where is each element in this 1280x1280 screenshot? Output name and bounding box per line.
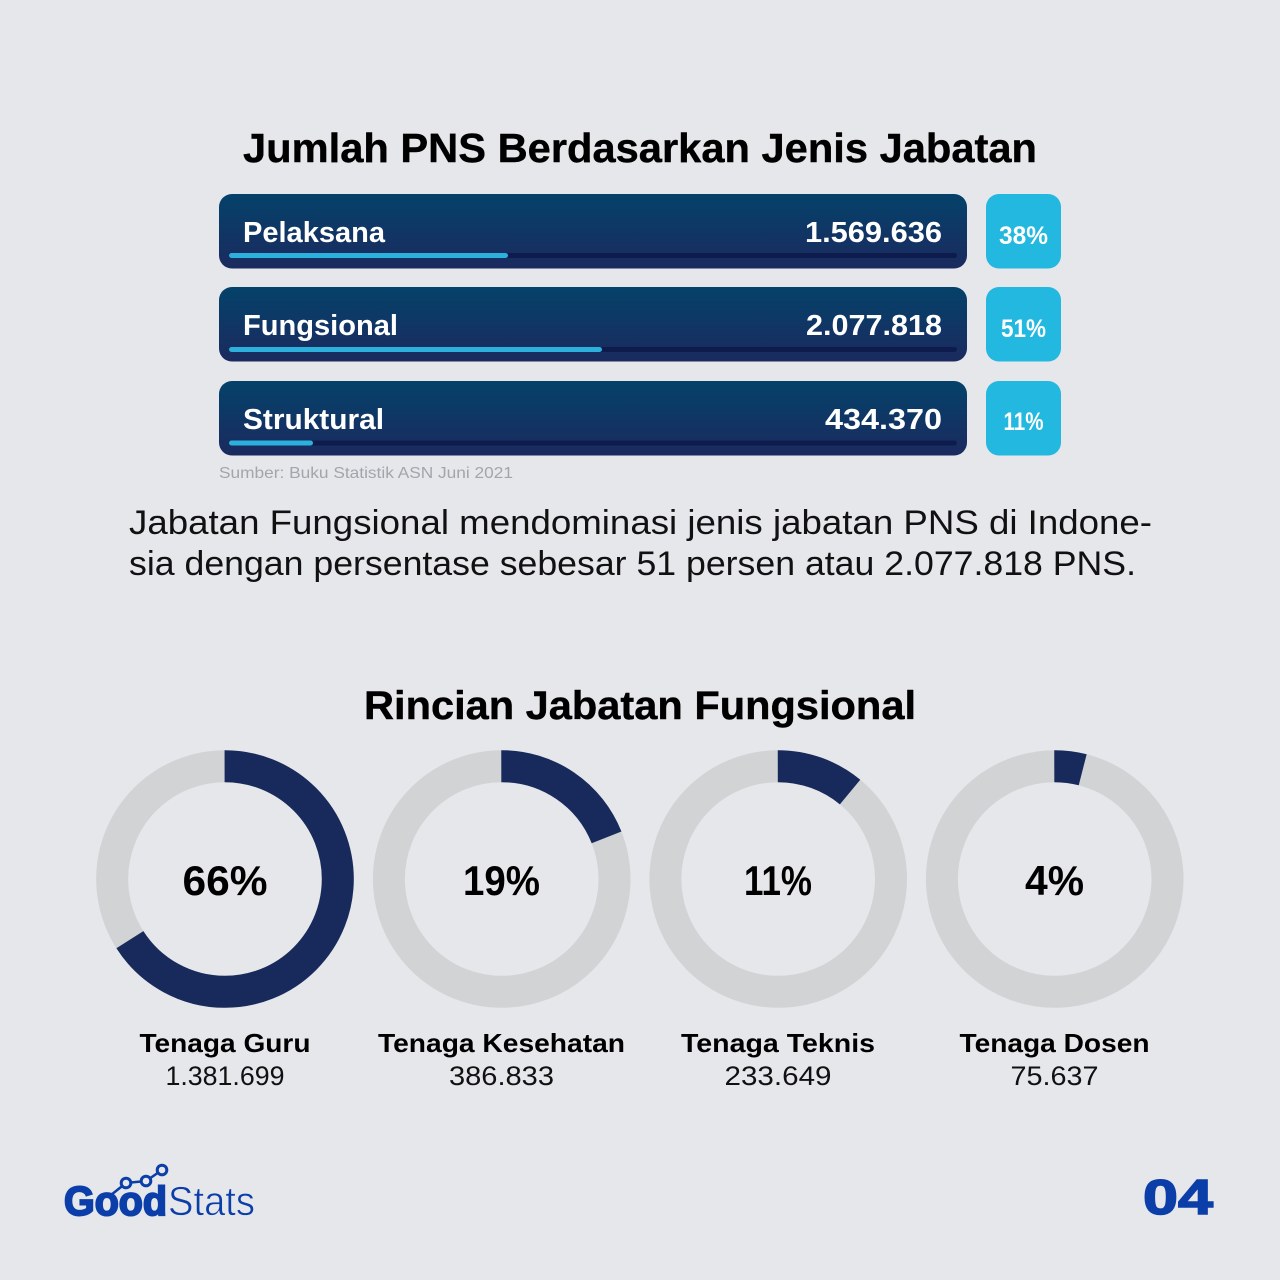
bar row: Struktural: Struktural xyxy=(243,404,384,436)
bar row: Struktural xyxy=(219,381,967,456)
donut: Tenaga Dosen xyxy=(942,766,1168,1091)
bar row: Pelaksana: 1.569.636 xyxy=(805,217,942,249)
percent tile: 11% xyxy=(986,381,1061,456)
percent tile: 38%: 38% xyxy=(999,222,1048,250)
donut: Tenaga Kesehatan: Tenaga Kesehatan xyxy=(378,1028,625,1058)
bar row: Pelaksana: Pelaksana xyxy=(243,217,386,249)
donut: Tenaga Dosen: 75.637 xyxy=(1010,1061,1098,1091)
donut: Tenaga Guru: 1.381.699 xyxy=(166,1061,284,1091)
donut: Tenaga Guru: 66% xyxy=(182,857,268,904)
bar row: Struktural: 434.370 xyxy=(825,404,942,436)
donut: Tenaga Guru xyxy=(112,766,338,1091)
donut: Tenaga Guru: Tenaga Guru xyxy=(140,1028,310,1058)
donut: Tenaga Teknis xyxy=(665,766,891,1091)
logo: GoodStats: Good xyxy=(64,1178,167,1224)
donut: Tenaga Kesehatan: 19% xyxy=(463,857,540,904)
bar row: Fungsional: Fungsional xyxy=(243,310,398,342)
paragraph: sia dengan persentase sebesar 51 persen atau 2.077.818 PNS. xyxy=(129,545,1136,583)
donut: Tenaga Teknis: Tenaga Teknis xyxy=(681,1028,875,1058)
logo: GoodStats: Stats xyxy=(168,1178,255,1224)
title: jenis jabatan: Jumlah PNS Berdasarkan Jenis Jabatan xyxy=(243,125,1037,171)
percent tile: 38% xyxy=(986,194,1061,268)
donut: Tenaga Teknis: 11% xyxy=(744,857,812,904)
bar row: Fungsional: 2.077.818 xyxy=(806,310,942,342)
logo: GoodStats xyxy=(64,1165,255,1224)
donut: Tenaga Teknis: 233.649 xyxy=(724,1061,832,1091)
percent tile: 51%: 51% xyxy=(1001,315,1046,343)
percent tile: 51% xyxy=(986,287,1061,362)
paragraph: Jabatan Fungsional mendominasi jenis jabatan PNS di Indone- xyxy=(129,504,1152,542)
bar row: Pelaksana xyxy=(219,194,967,268)
paragraph xyxy=(129,504,1152,583)
bar row: Fungsional xyxy=(219,287,967,362)
percent tile: 11%: 11% xyxy=(1004,408,1044,436)
donut: Tenaga Kesehatan xyxy=(378,766,625,1091)
donut: Tenaga Dosen: Tenaga Dosen xyxy=(960,1028,1150,1058)
page number: 04 xyxy=(1143,1171,1213,1225)
donut: Tenaga Kesehatan: 386.833 xyxy=(449,1061,554,1091)
title: rincian: Rincian Jabatan Fungsional xyxy=(364,684,916,728)
donut: Tenaga Dosen: 4% xyxy=(1025,857,1084,904)
source note: Sumber: Buku Statistik ASN Juni 2021 xyxy=(219,465,513,482)
